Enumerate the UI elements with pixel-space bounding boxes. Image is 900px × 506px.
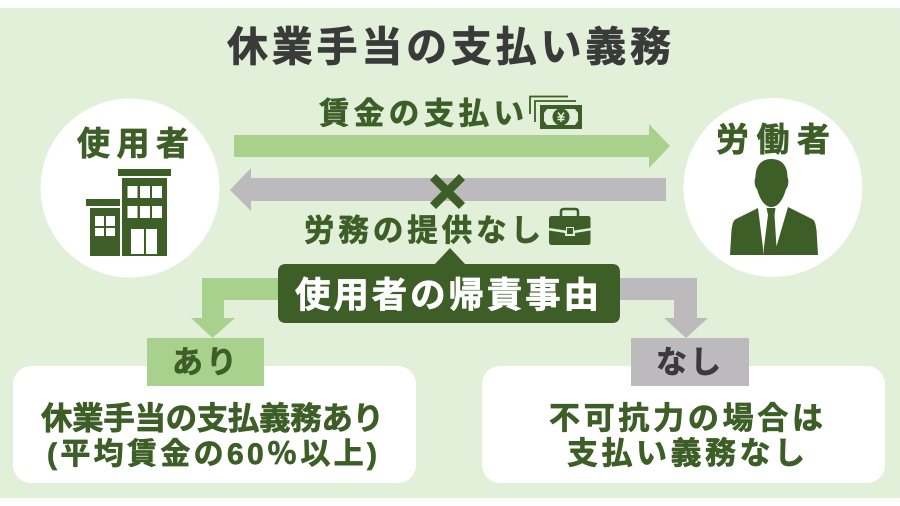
employer label: 使用者 <box>77 125 189 162</box>
no result text line 2: 支払い義務なし <box>567 436 805 471</box>
labor label: 労務の提供なし <box>304 214 541 248</box>
branch arrow: yes <box>191 278 280 338</box>
wage label: 賃金の支払い <box>319 97 524 131</box>
no tag label: なし <box>656 345 721 380</box>
worker label: 労働者 <box>716 121 830 158</box>
icon: businessman <box>730 159 818 255</box>
no result text line 1: 不可抗力の場合は <box>549 401 823 436</box>
arrow: labor provision <box>230 168 666 211</box>
cross mark <box>433 177 462 206</box>
decision label: 使用者の帰責事由 <box>295 275 599 315</box>
icon: briefcase <box>549 209 590 245</box>
panel: worker <box>684 98 862 277</box>
icon: building <box>86 169 171 256</box>
panel: result no <box>482 338 885 483</box>
decision box <box>278 248 620 323</box>
arrow: wage payment <box>234 124 670 168</box>
panel: employer <box>40 98 220 278</box>
yes tag <box>147 338 264 386</box>
yes result text line 2: (平均賃金の60％以上) <box>47 438 377 471</box>
yes result text line 1: 休業手当の支払義務あり <box>41 400 384 436</box>
yes tag label: あり <box>172 345 237 380</box>
title: 休業手当の支払い義務 <box>227 24 671 70</box>
panel: result yes <box>13 338 416 483</box>
icon: money <box>530 96 582 129</box>
no tag <box>631 338 749 386</box>
branch arrow: no <box>618 278 708 338</box>
